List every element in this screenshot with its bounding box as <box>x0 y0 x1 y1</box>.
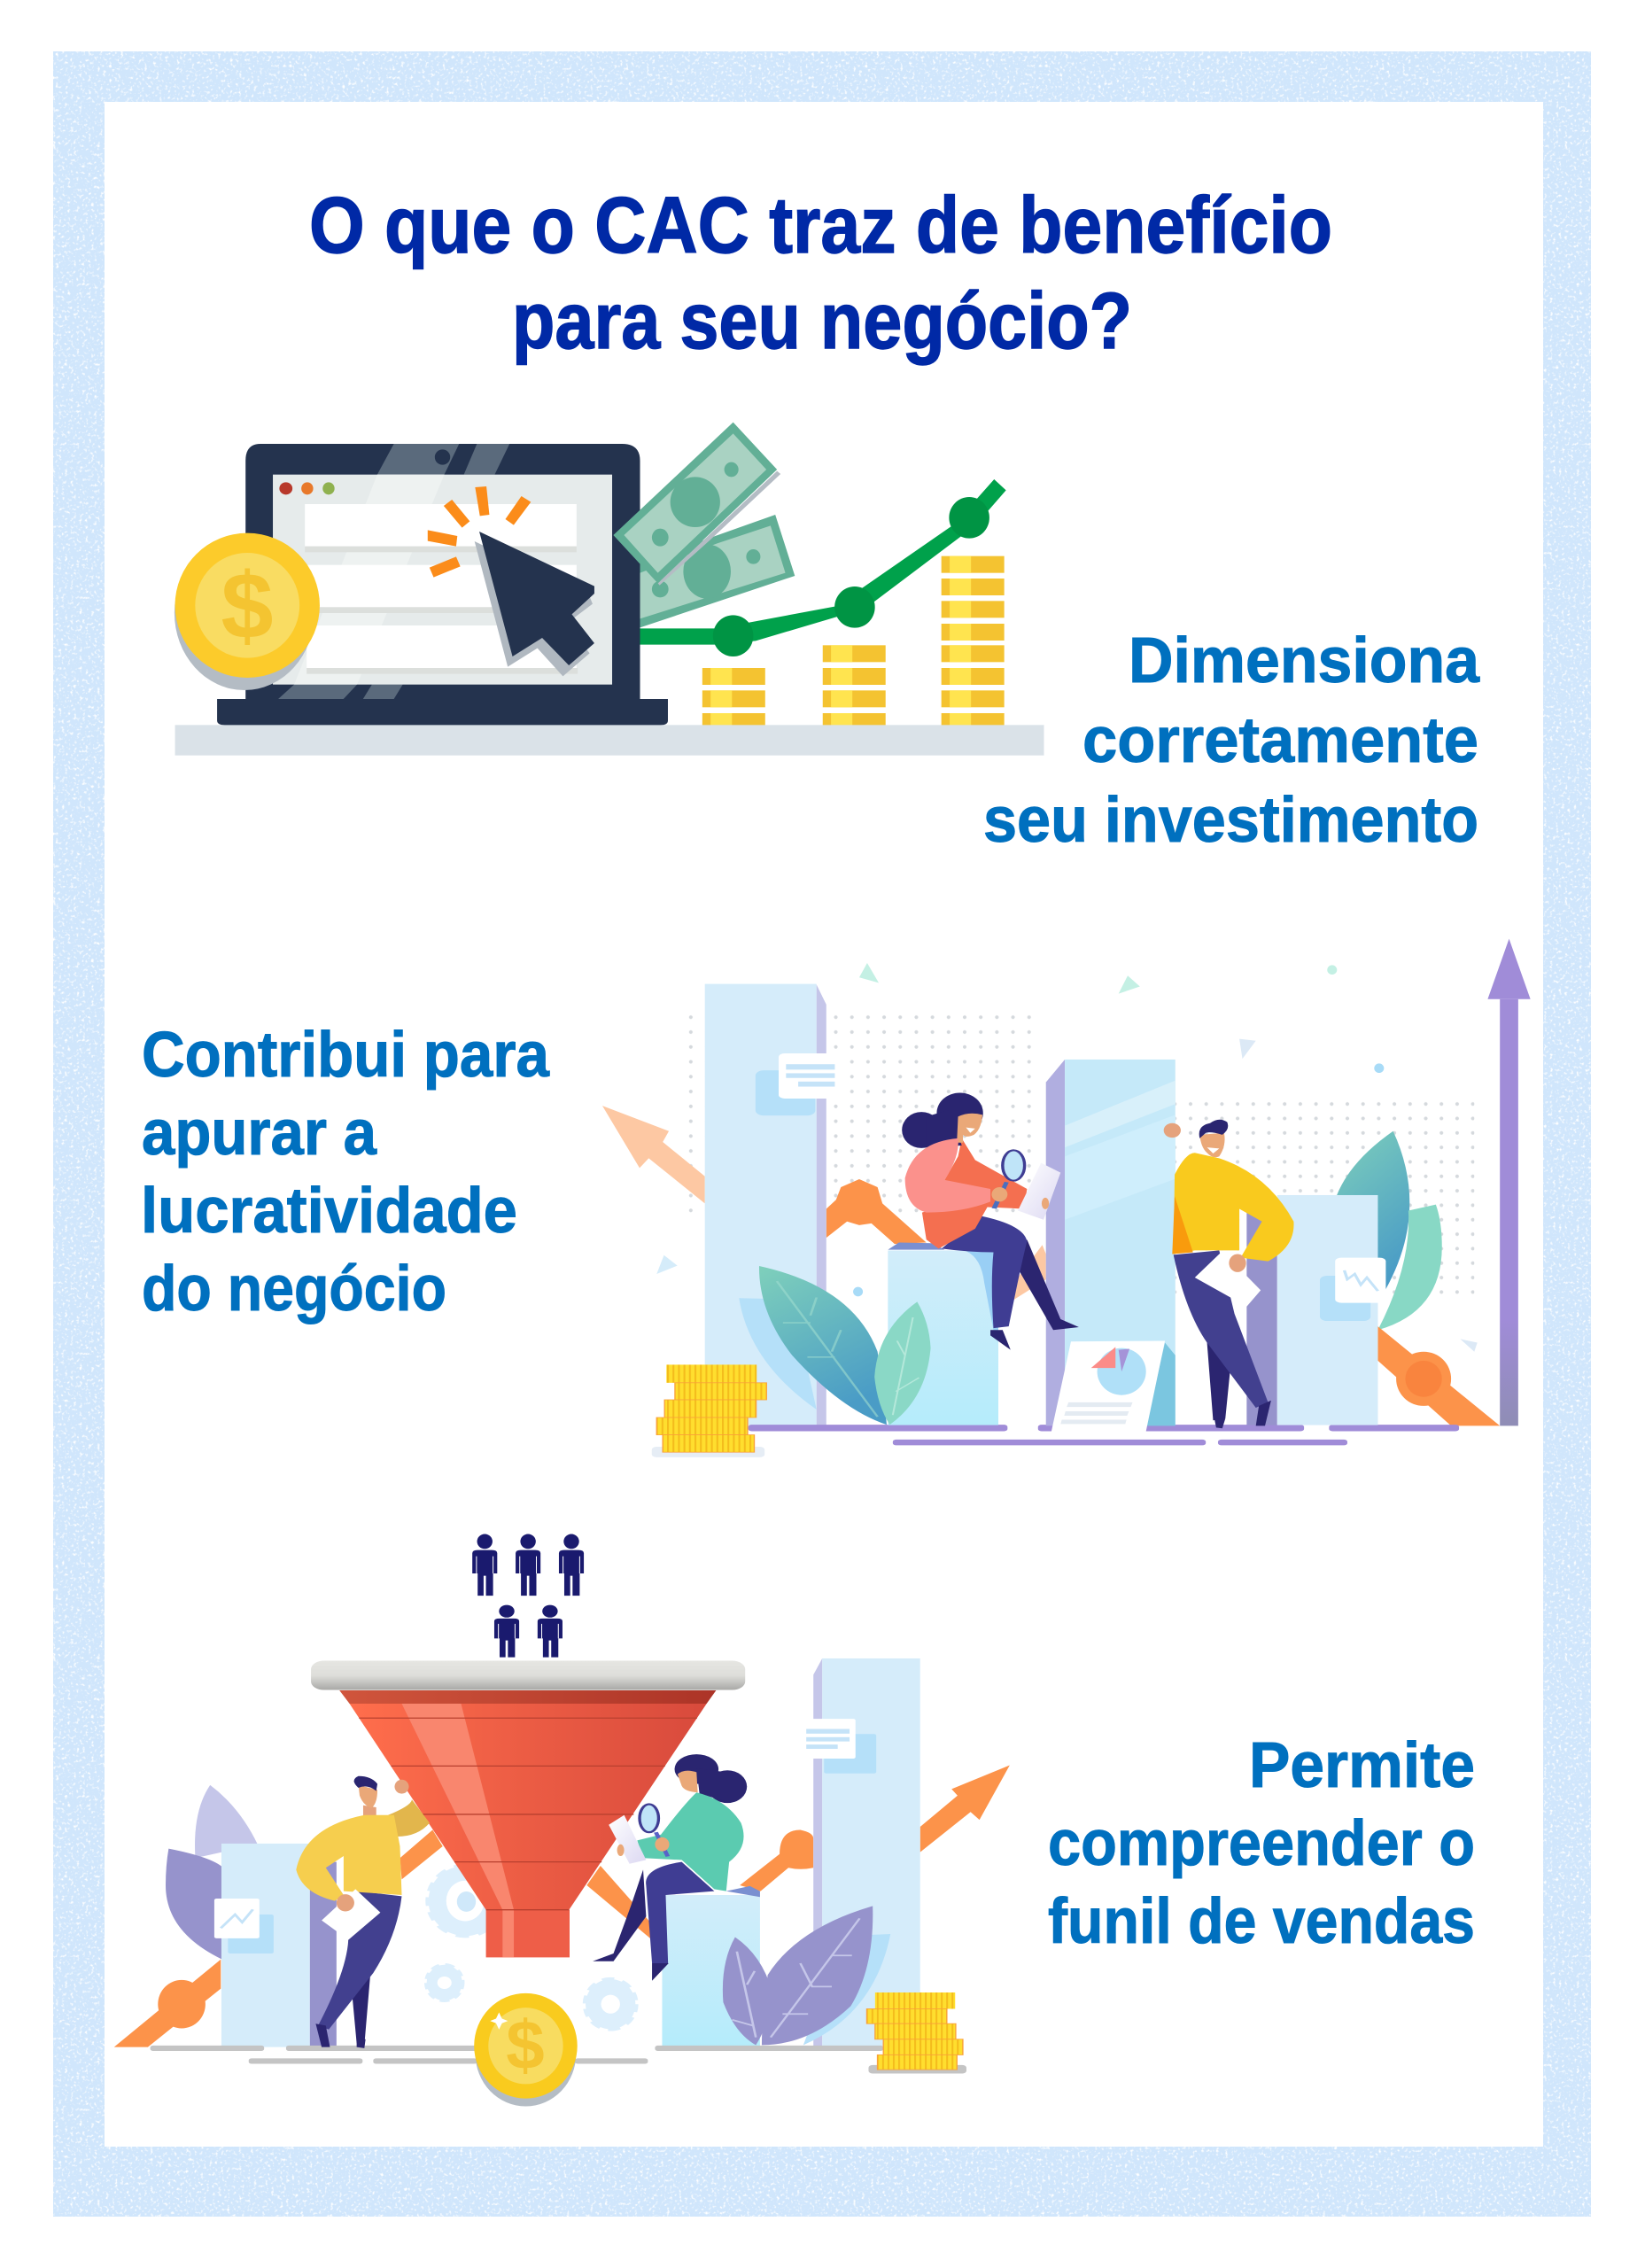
purple arrow <box>1487 939 1531 1425</box>
bar 4 <box>1246 1195 1385 1425</box>
tall right bar <box>797 1658 920 2046</box>
bar 1 <box>705 984 844 1425</box>
lower banknote <box>640 515 795 627</box>
coin pile left <box>652 1364 766 1457</box>
left leaves <box>166 1785 258 1960</box>
title: para seu negócio? <box>512 277 1132 366</box>
woman sitting with magnifier <box>902 1092 1079 1350</box>
text: permite: Permite <box>1249 1730 1475 1801</box>
text: contribui: Contribui para <box>142 1020 550 1091</box>
illustration: laptop, cursor, coin, money and growth chart <box>175 423 1044 756</box>
green growth line <box>640 479 1006 656</box>
funnel <box>311 1661 745 1957</box>
coin stacks <box>702 556 1005 730</box>
title <box>309 182 1332 366</box>
text: contribui <box>141 1020 550 1324</box>
bar 3 <box>1046 1060 1176 1425</box>
title: O que o CAC traz de benefício <box>309 182 1332 270</box>
man standing with paper <box>1164 1120 1294 1428</box>
peach arrow <box>602 1106 705 1203</box>
right leaves <box>723 1906 890 2045</box>
dot grids <box>687 1014 1474 1294</box>
report sheet with pie chart <box>1051 1340 1176 1432</box>
text: contribui: apurar a <box>142 1098 377 1169</box>
text: permite <box>1048 1730 1475 1957</box>
text: dimensiona: corretamente <box>1082 705 1478 776</box>
text: permite: compreender o <box>1048 1808 1475 1879</box>
seat bar <box>662 1886 760 2046</box>
floor lines <box>151 2046 883 2064</box>
illustration: sales funnel <box>114 1534 1010 2106</box>
man with raised arm <box>296 1776 430 2048</box>
laptop <box>217 444 668 725</box>
coin dollar sign: $ <box>221 554 273 658</box>
people entering funnel <box>472 1534 584 1658</box>
text: permite: funil de vendas <box>1048 1886 1475 1957</box>
right leaves <box>1332 1131 1442 1330</box>
orange trend line <box>114 1765 1010 2047</box>
small decorative triangles and dots <box>656 963 1478 1352</box>
coin <box>474 1993 578 2106</box>
coin pile right <box>866 1992 966 2074</box>
illustration: people analysing bar chart <box>602 939 1531 1457</box>
text: dimensiona: Dimensiona <box>1129 625 1480 696</box>
orange trend line <box>826 1179 1500 1425</box>
text: contribui: lucratividade <box>141 1176 517 1247</box>
click sparks <box>428 486 531 578</box>
text: contribui: do negócio <box>142 1254 446 1324</box>
woman sitting with magnifier <box>593 1754 747 1981</box>
funnel coin dollar sign: $ <box>506 2006 545 2084</box>
text: dimensiona <box>983 625 1480 856</box>
shelf <box>175 725 1044 756</box>
left leaves <box>739 1266 931 1425</box>
cursor arrow <box>475 532 594 676</box>
coin <box>175 533 320 690</box>
upper banknote <box>613 423 780 586</box>
seat bar <box>888 1242 1046 1425</box>
left bar <box>214 1844 337 2047</box>
text: dimensiona: seu investimento <box>983 785 1478 856</box>
floor lines <box>749 1425 1459 1445</box>
gears <box>427 1866 635 2029</box>
